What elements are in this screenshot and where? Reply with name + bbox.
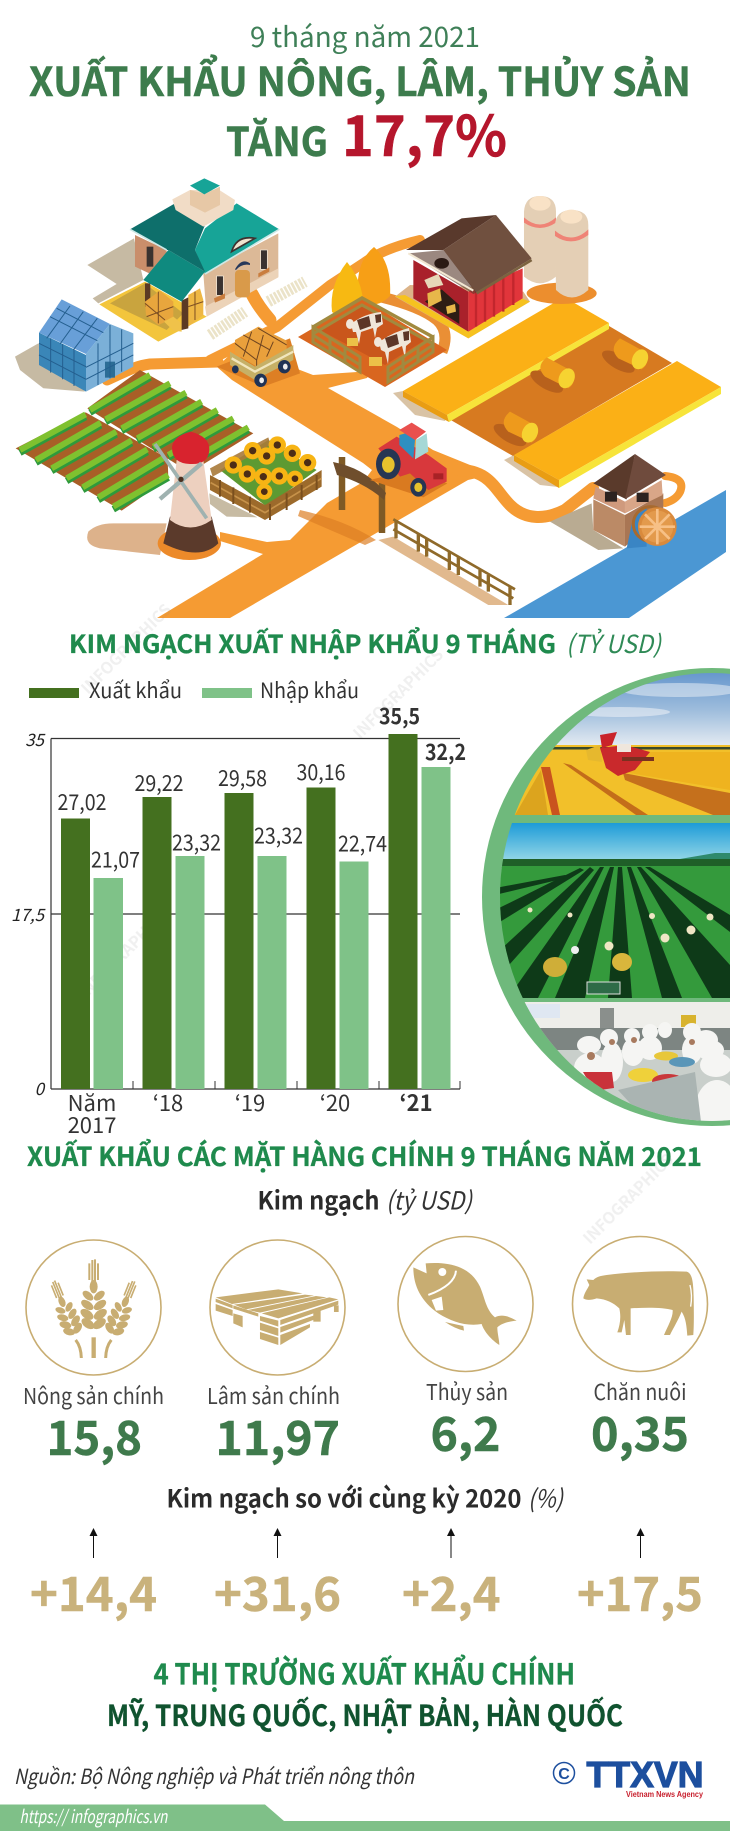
gate — [298, 457, 386, 545]
product labels and values: 6,2 — [430, 1396, 500, 1465]
growth values — [30, 1556, 703, 1625]
arrows: increase — [90, 1528, 644, 1558]
value labels: 29,58 — [218, 761, 267, 793]
watermill — [550, 503, 623, 550]
wheat field — [393, 297, 721, 488]
chart legend: Xuất khẩu — [89, 675, 182, 705]
roads — [107, 240, 681, 618]
product labels and values: Lâm sản chính — [207, 1379, 340, 1411]
logo: TTXVN: TTXVN — [586, 1754, 704, 1795]
axis labels — [11, 726, 47, 1100]
bar chart: export and import turnover: ‘20 — [320, 1086, 350, 1118]
watermark: INFOGRAPHICS — [75, 597, 176, 699]
footer bar with website — [0, 1803, 730, 1831]
subheading: kim ngạch — [258, 1182, 473, 1218]
watermark: INFOGRAPHICS — [577, 1147, 678, 1249]
value labels: 21,07 — [91, 842, 140, 874]
photo oval: harvest, tea field and seafood processing — [480, 665, 730, 1140]
bar chart: export and import turnover: Năm — [68, 1086, 116, 1118]
photo: seafood processing — [524, 1002, 730, 1121]
chart legend: Nhập khẩu — [260, 675, 359, 705]
heading: 4 thị trường xuất khẩu chính: 4 THỊ TRƯỜNG XUẤT KHẨU CHÍNH — [154, 1652, 575, 1694]
bar chart: export and import turnover: ‘19 — [235, 1086, 265, 1118]
product labels and values: Nông sản chính — [23, 1379, 164, 1411]
subheading: kim ngạch so với cùng kỳ 2020: Kim ngạch so với cùng kỳ 2020 — [166, 1480, 522, 1516]
bar chart: export and import turnover: ‘18 — [153, 1086, 183, 1118]
light bars: import — [94, 767, 450, 1089]
photo: tea field — [480, 823, 730, 998]
title: tăng 17,7%: TĂNG — [226, 110, 328, 168]
illustration: isometric farm — [15, 178, 726, 618]
corn stacks — [332, 247, 390, 319]
fence — [393, 519, 515, 598]
watermark: INFOGRAPHICS — [72, 902, 173, 1004]
growth values: +17,5 — [577, 1556, 703, 1625]
bar chart: export and import turnover: ‘21 — [399, 1086, 433, 1118]
value labels: 32,2 — [425, 735, 466, 767]
value labels: 35,5 — [379, 699, 420, 731]
value labels: 27,02 — [58, 785, 106, 817]
footer bar with website: https:// infographics.vn — [20, 1803, 168, 1829]
value labels — [58, 699, 466, 874]
title: tăng 17,7%: 17,7% — [342, 92, 507, 173]
heading: kim ngạch xuất nhập khẩu 9 tháng: KIM NGẠCH XUẤT NHẬP KHẨU 9 THÁNG — [69, 625, 556, 661]
value labels: 22,74 — [338, 826, 387, 858]
logo: TTXVN: C — [558, 1766, 570, 1783]
barn and silos — [395, 196, 597, 338]
value labels: 23,32 — [254, 818, 303, 850]
main markets: MỸ, TRUNG QUỐC, NHẬT BẢN, HÀN QUỐC — [107, 1693, 623, 1735]
title: tăng 17,7% — [226, 92, 507, 173]
icon: wheat — [26, 1240, 161, 1375]
bar chart: export and import turnover — [11, 699, 466, 1140]
value labels: 23,32 — [172, 826, 221, 858]
value labels: 30,16 — [296, 755, 346, 787]
water — [504, 490, 726, 618]
bar chart: export and import turnover: 2017 — [68, 1108, 116, 1140]
growth values: +14,4 — [30, 1556, 157, 1625]
subtitle: 9 tháng năm 2021: 9 tháng năm 2021 — [250, 16, 480, 56]
icon: fish — [398, 1236, 533, 1372]
pasture with cows — [298, 298, 447, 387]
product labels and values: 15,8 — [46, 1400, 142, 1469]
subheading: kim ngạch: Kim ngạch — [258, 1182, 380, 1218]
hay bales — [527, 338, 651, 397]
heading: kim ngạch xuất nhập khẩu 9 tháng: (TỶ USD) — [566, 625, 662, 661]
tractor, fence and watermill — [370, 423, 675, 605]
watermark: INFOGRAPHICS — [347, 642, 448, 744]
axis labels: 0 — [35, 1075, 47, 1100]
watermark — [72, 597, 678, 1249]
cart with hay — [217, 327, 300, 387]
title: xuất khẩu nông, lâm, thủy sản: XUẤT KHẨU NÔNG, LÂM, THỦY SẢN — [29, 50, 691, 108]
dark bars: export — [61, 734, 418, 1089]
logo: TTXVN: Vietnam News Agency — [626, 1790, 703, 1799]
watermark: INFOGRAPHICS — [527, 782, 628, 884]
source: Nguồn: Bộ Nông nghiệp và Phát triển nông thôn — [14, 1761, 415, 1791]
growth values: +2,4 — [402, 1556, 500, 1625]
chart legend — [29, 675, 359, 705]
axis labels: 17,5 — [11, 901, 46, 926]
growth values: +31,6 — [214, 1556, 341, 1625]
subheading: kim ngạch so với cùng kỳ 2020: (%) — [528, 1480, 564, 1516]
product labels and values: Chăn nuôi — [594, 1375, 686, 1407]
photo: rice harvest — [514, 673, 730, 815]
product labels and values: 11,97 — [216, 1400, 340, 1469]
value labels: 29,22 — [134, 766, 184, 798]
icon: wood pallet — [210, 1240, 345, 1375]
product labels and values — [23, 1375, 689, 1469]
product labels and values: 0,35 — [591, 1396, 689, 1465]
subheading: kim ngạch: (tỷ USD) — [386, 1182, 473, 1218]
house and greenhouse — [15, 178, 305, 392]
sunflower box — [209, 436, 322, 520]
windmill — [87, 432, 221, 560]
axis labels: 35 — [25, 726, 46, 751]
crop fields, sunflowers and windmill — [16, 370, 322, 560]
heading: xuất khẩu các mặt hàng chính: XUẤT KHẨU CÁC MẶT HÀNG CHÍNH 9 THÁNG NĂM 2021 — [27, 1137, 702, 1174]
product labels and values: Thủy sản — [426, 1375, 508, 1407]
icon: cow — [572, 1236, 708, 1372]
